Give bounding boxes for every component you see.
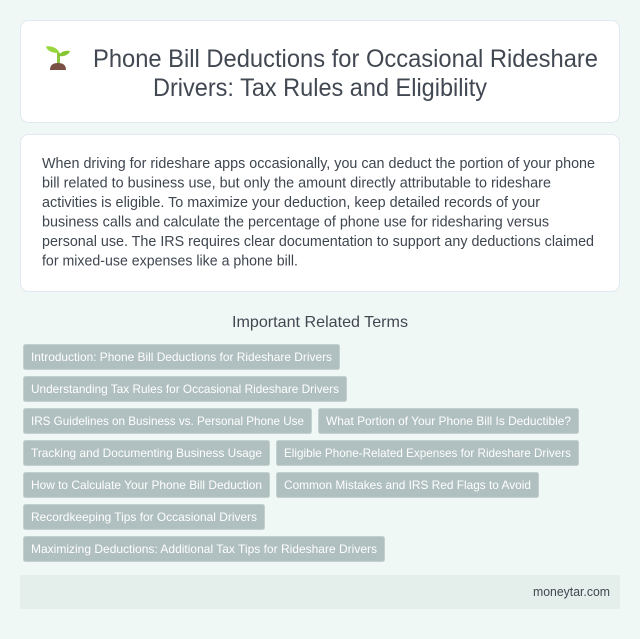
tag: How to Calculate Your Phone Bill Deduction — [31, 478, 262, 492]
title: Phone Bill Deductions for Occasional Rideshare — [93, 45, 598, 73]
tag: Common Mistakes and IRS Red Flags to Avoid — [284, 478, 531, 492]
tag — [276, 440, 578, 466]
text block: summary: business calls and calculate the percentage of phone use for ridesharing versus — [42, 214, 549, 230]
tag — [24, 504, 264, 530]
tag: Understanding Tax Rules for Occasional Rideshare Drivers — [31, 382, 339, 396]
tag: Tracking and Documenting Business Usage — [31, 446, 262, 460]
tag — [24, 344, 340, 370]
panel: summary text — [20, 134, 620, 292]
tag: IRS Guidelines on Business vs. Personal Phone Use — [31, 414, 304, 428]
tag — [24, 408, 312, 434]
footer bar — [20, 575, 620, 609]
title: Drivers: Tax Rules and Eligibility — [153, 74, 487, 102]
tag — [24, 536, 384, 562]
tag — [24, 440, 270, 466]
tag: Recordkeeping Tips for Occasional Drivers — [31, 510, 257, 524]
text block: summary: bill related to business use, but only the amount directly attributable to rideshare — [42, 176, 551, 192]
text block: summary: activities is eligible. To maximize your deduction, keep detailed records of your — [42, 195, 540, 211]
text block: summary: personal use. The IRS requires clear documentation to support any deductions claimed — [42, 234, 594, 250]
footer: site name: moneytar.com — [533, 585, 610, 599]
icon: seedling — [46, 46, 70, 70]
tag: What Portion of Your Phone Bill Is Deductible? — [326, 414, 571, 428]
tag list: related terms — [24, 344, 578, 562]
text block: summary: When driving for rideshare apps occasionally, you can deduct the portion of your phone — [42, 156, 595, 172]
panel: title card — [20, 20, 620, 122]
title — [93, 45, 598, 102]
text block: summary: for mixed-use expenses like a phone bill. — [42, 254, 298, 270]
text block: summary — [42, 156, 595, 270]
tag — [318, 408, 578, 434]
tag: Maximizing Deductions: Additional Tax Tips for Rideshare Drivers — [31, 542, 377, 556]
tag — [276, 472, 538, 498]
tag — [24, 472, 270, 498]
heading: related terms: Important Related Terms — [232, 314, 408, 331]
tag: Introduction: Phone Bill Deductions for Rideshare Drivers — [31, 350, 332, 364]
tag — [24, 376, 346, 402]
tag: Eligible Phone-Related Expenses for Rideshare Drivers — [284, 446, 571, 460]
